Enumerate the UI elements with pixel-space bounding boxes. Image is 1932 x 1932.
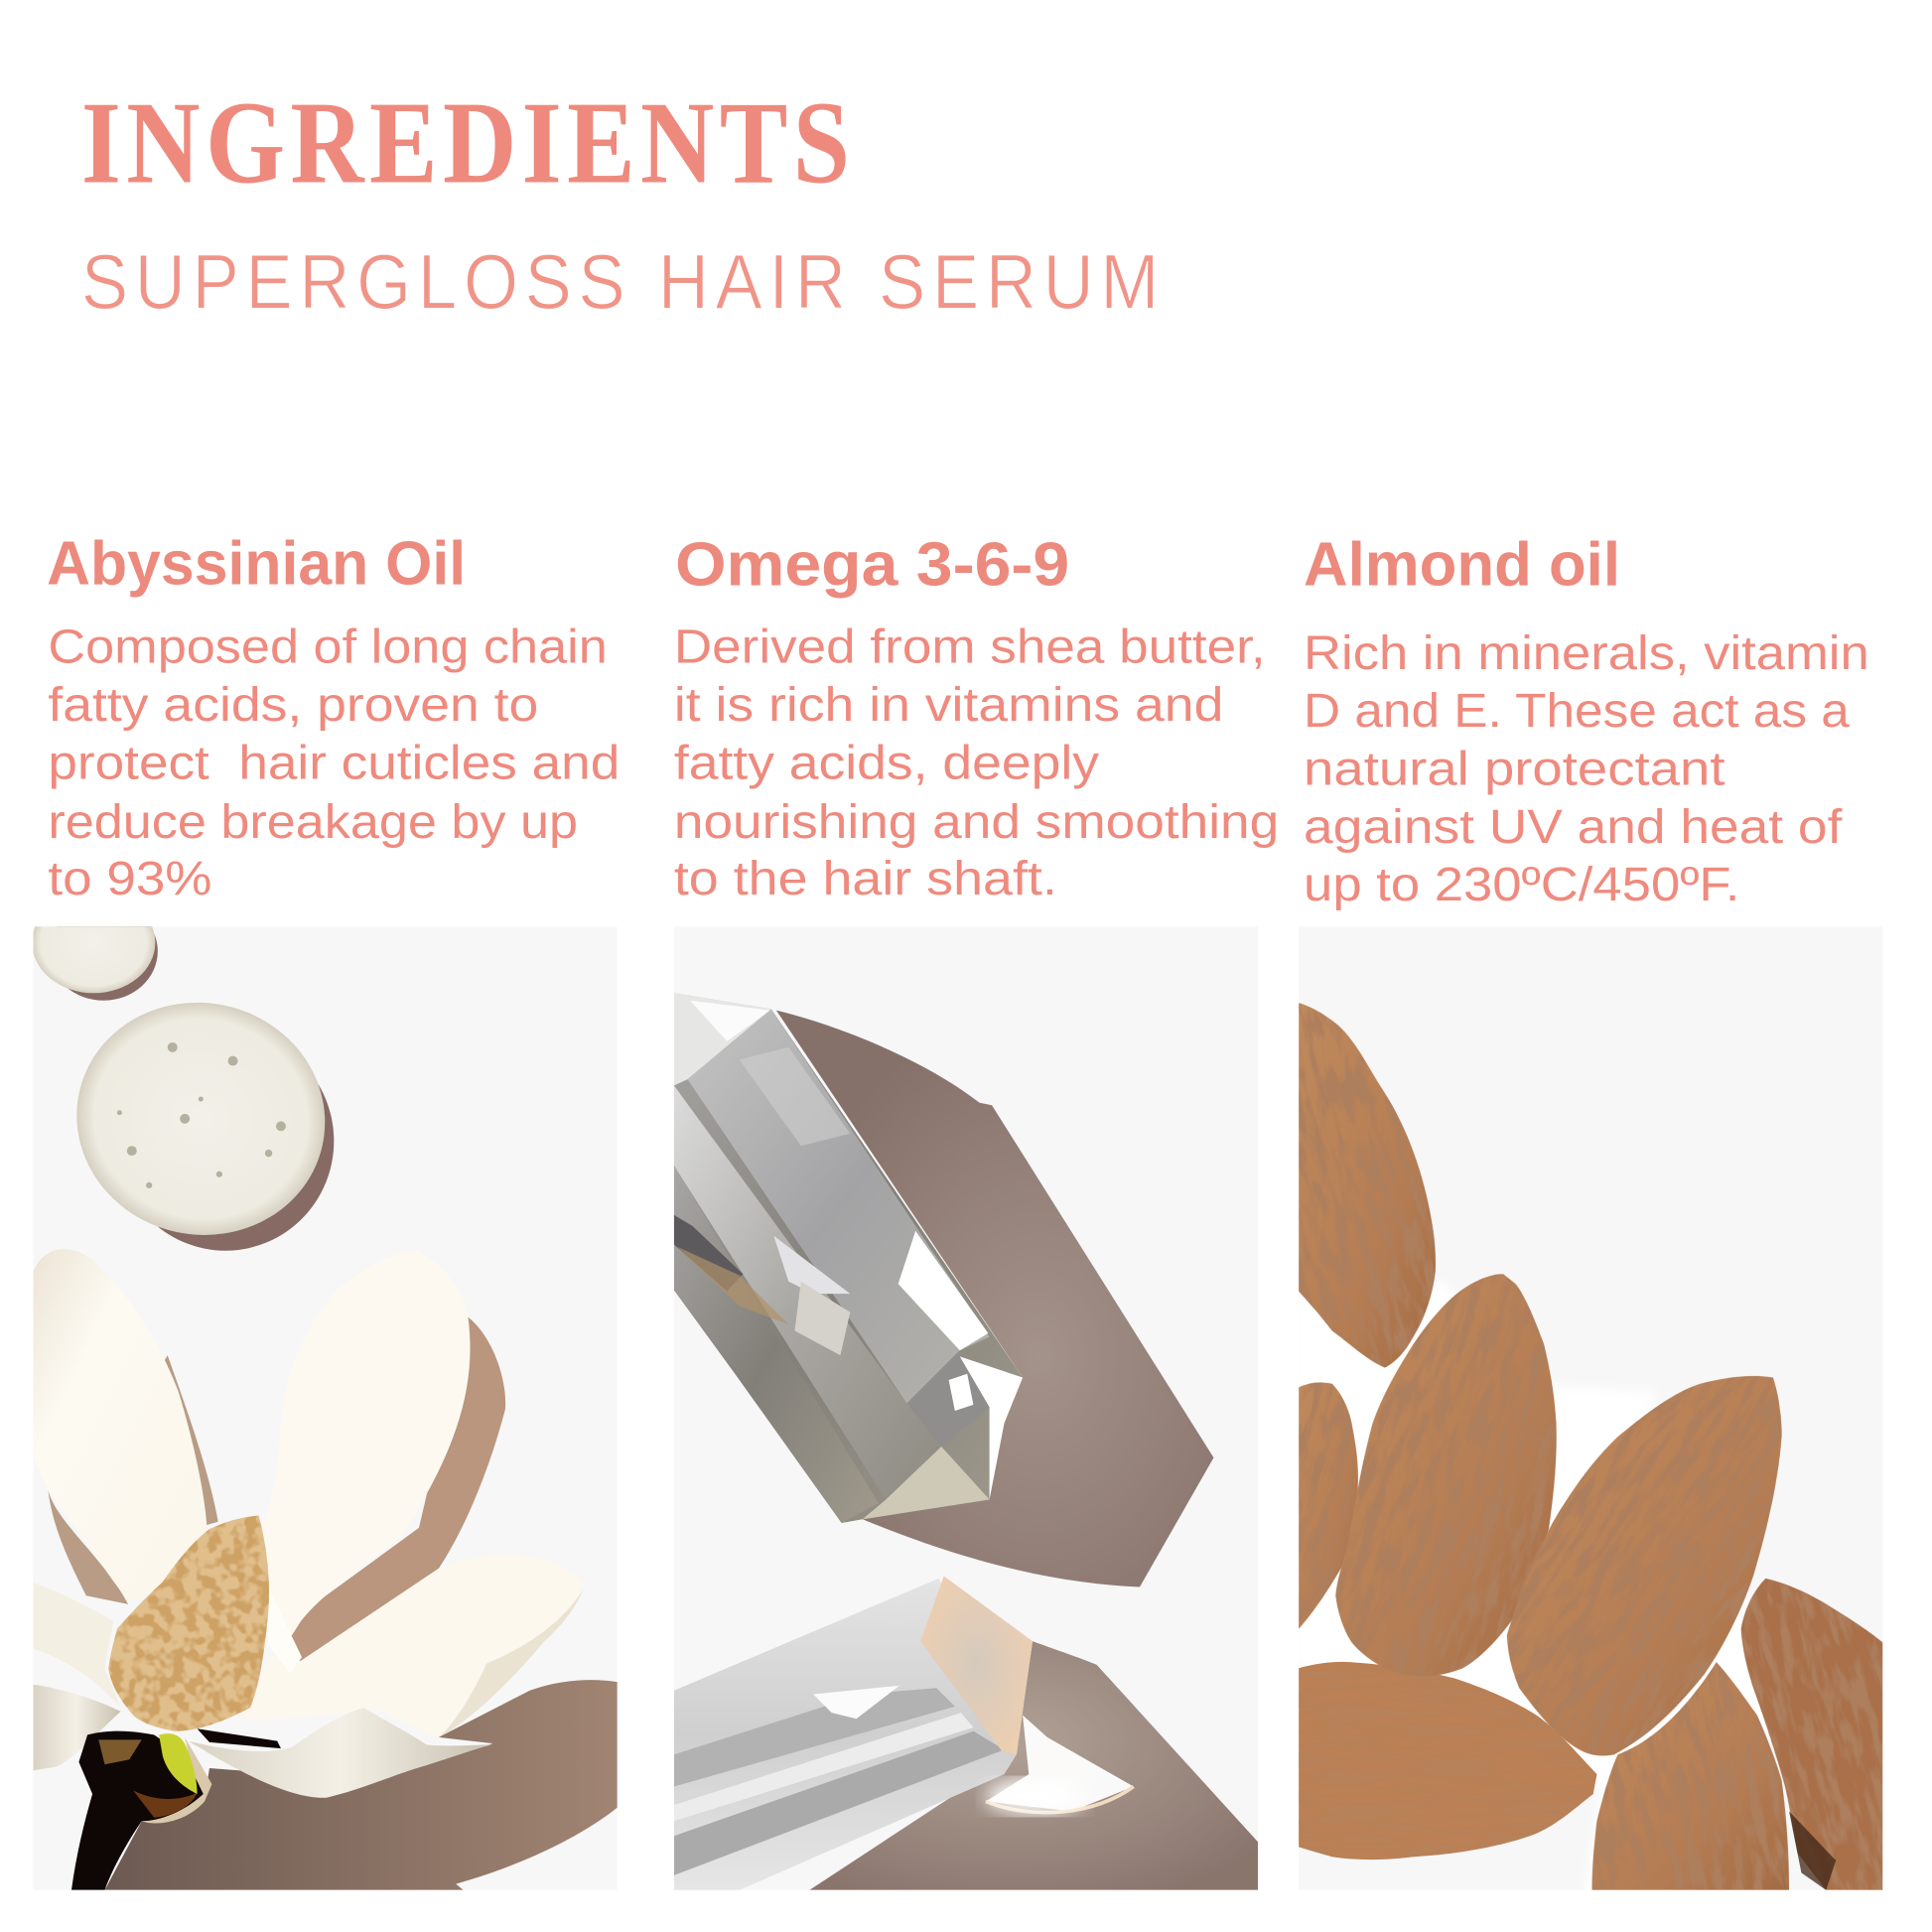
description: Omega 3-6-9: nourishing and smoothing <box>674 795 1279 849</box>
flower stem <box>71 1731 204 1890</box>
panel: magnolia and serum drops <box>32 893 618 1890</box>
description: Almond oil: Rich in minerals, vitamin <box>1304 626 1869 680</box>
almond top left <box>1299 1003 1436 1368</box>
description: Abyssinian Oil <box>48 621 620 905</box>
heading: Omega 3-6-9: Omega 3-6-9 <box>675 531 1069 600</box>
panel: almonds <box>1299 1003 1882 1890</box>
description: Abyssinian Oil: to 93% <box>48 852 211 905</box>
column: Almond oil text <box>1304 531 1869 911</box>
heading: Abyssinian Oil: Abyssinian Oil <box>47 529 466 598</box>
panel: crystals <box>674 926 1258 1890</box>
heading: Almond oil: Almond oil <box>1304 531 1620 600</box>
almond large <box>1507 1376 1782 1756</box>
description: Omega 3-6-9: fatty acids, deeply <box>674 736 1100 789</box>
title: INGREDIENTS <box>81 77 855 208</box>
description: Omega 3-6-9: Derived from shea butter, <box>674 621 1266 674</box>
description: Almond oil: natural protectant <box>1304 743 1725 796</box>
crystal lower <box>674 1576 1134 1890</box>
subtitle: SUPERGLOSS HAIR SERUM <box>81 237 1166 325</box>
icon: large serum drop <box>76 1003 334 1251</box>
description: Abyssinian Oil: Composed of long chain <box>48 621 608 674</box>
description: Omega 3-6-9: to the hair shaft. <box>674 852 1057 905</box>
almond bottom long <box>1299 1662 1596 1860</box>
flower shadow on ground <box>104 1680 618 1890</box>
almond bottom middle <box>1591 1662 1789 1890</box>
crystal tip <box>920 1576 1033 1754</box>
description: Almond oil: up to 230ºC/450ºF. <box>1304 858 1739 911</box>
description: Almond oil <box>1304 626 1869 911</box>
description: Omega 3-6-9 <box>674 621 1279 905</box>
almond centre <box>1335 1274 1557 1676</box>
description: Almond oil: against UV and heat of <box>1304 800 1843 854</box>
almond right <box>1740 1579 1882 1890</box>
crystal upper <box>674 993 1023 1523</box>
flower calyx <box>159 1733 198 1794</box>
almond left middle <box>1299 1382 1358 1629</box>
crystal shadow lower <box>809 1641 1258 1890</box>
description: Omega 3-6-9: it is rich in vitamins and <box>674 678 1223 732</box>
column: Omega 3-6-9 text <box>674 531 1279 905</box>
flower <box>32 1249 583 1890</box>
petal shadows <box>48 1317 505 1661</box>
description: Abyssinian Oil: protect hair cuticles and <box>48 736 620 789</box>
icon: small serum drop <box>34 926 158 1001</box>
crystal shadow upper <box>776 1011 1213 1587</box>
description: Almond oil: D and E. These act as a <box>1304 684 1850 738</box>
white shadows behind almonds <box>1294 1282 1780 1897</box>
column: Abyssinian Oil text <box>47 529 620 905</box>
description: Abyssinian Oil: reduce breakage by up <box>48 795 578 849</box>
description: Abyssinian Oil: fatty acids, proven to <box>48 678 538 732</box>
flower cone <box>108 1516 269 1731</box>
